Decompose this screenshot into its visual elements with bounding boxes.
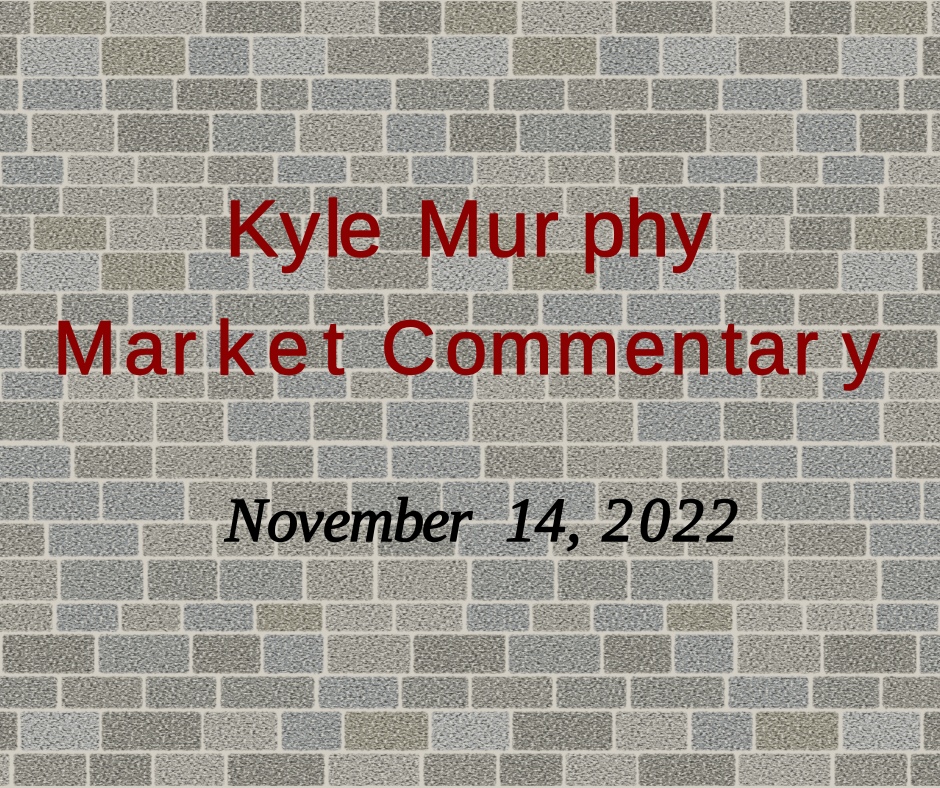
date: November 14, 2022 — [224, 487, 738, 555]
title line 1: Kyle Murphy — [225, 184, 711, 273]
title line 2: Market Commentary — [53, 306, 880, 391]
